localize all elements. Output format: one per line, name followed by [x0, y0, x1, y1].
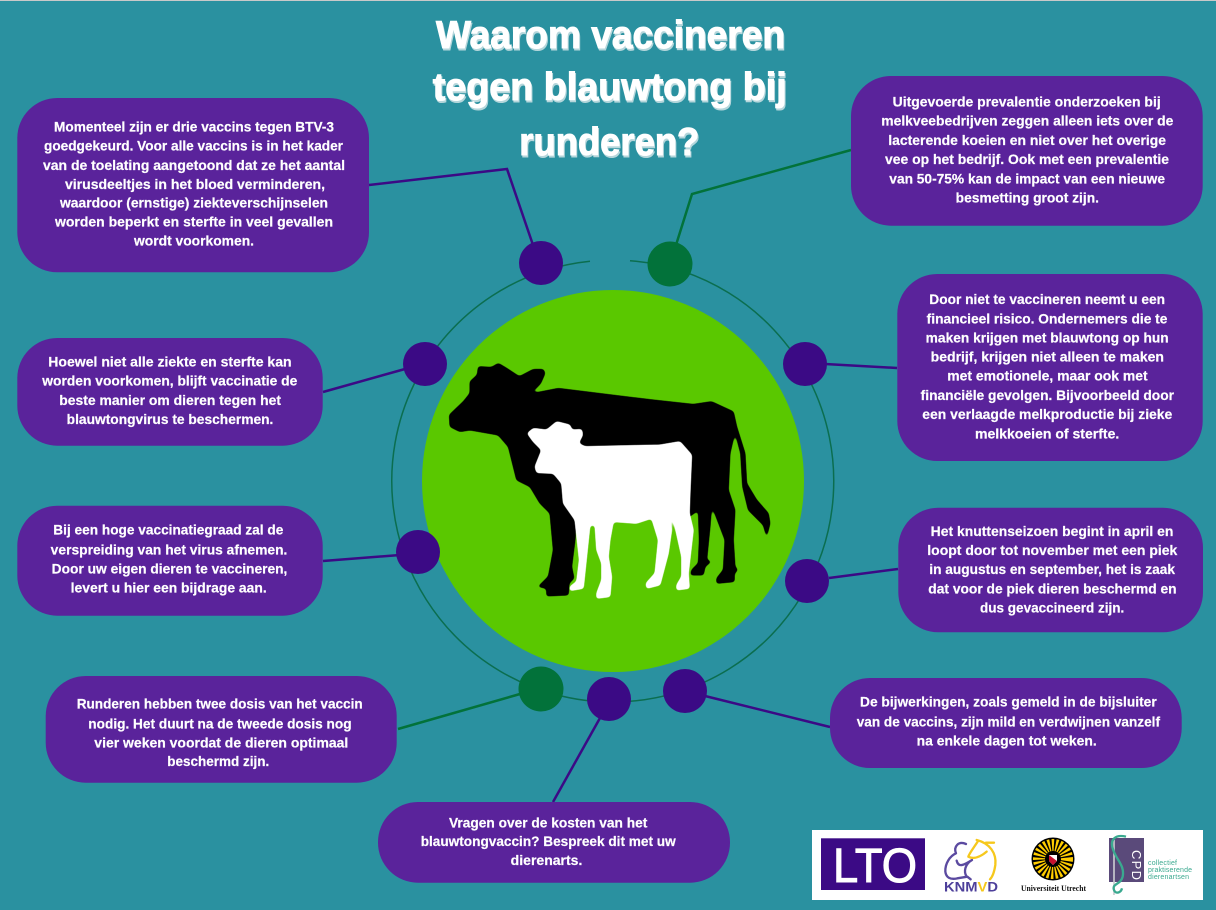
text: beste manier: Hoewel niet alle ziekte en sterfte kan — [48, 355, 292, 370]
title: Waarom vaccineren — [436, 14, 785, 57]
icon: cow and calf silhouettes — [449, 363, 770, 598]
text: beste manier: worden voorkomen, blijft vaccinatie de — [41, 374, 298, 389]
central green disc — [422, 290, 804, 672]
node 7 — [518, 666, 564, 712]
connector: knuttenseizoen — [829, 569, 898, 578]
connector: kosten — [553, 718, 600, 802]
text: vaccins BTV-3: virusdeeltjes in het bloed verminderen, — [65, 177, 325, 192]
text: kosten: Vragen over de kosten van het — [449, 815, 648, 830]
text: twee dosis: nodig. Het duurt na de tweede dosis nog — [88, 716, 352, 731]
text: vaccins BTV-3: Momenteel zijn er drie vaccins tegen BTV-3 — [54, 120, 334, 135]
title — [433, 14, 787, 164]
text: prevalentie — [881, 95, 1174, 205]
icon: black cow — [449, 363, 770, 596]
text: knuttenseizoen: loopt door tot november met een piek — [927, 543, 1178, 558]
connector: BTV-3 vaccins — [369, 169, 533, 245]
logo: CPD: dierenartsen — [1148, 874, 1189, 881]
text: twee dosis: beschermd zijn. — [167, 754, 269, 769]
text: prevalentie: melkveebedrijven zeggen alleen iets over de — [881, 114, 1174, 129]
text: financieel risico — [921, 292, 1175, 441]
text: prevalentie: Uitgevoerde prevalentie onderzoeken bij — [893, 95, 1161, 110]
logo: Universiteit Utrecht: Universiteit Utrecht — [1021, 884, 1086, 893]
text: bijwerkingen: na enkele dagen tot weken. — [917, 734, 1097, 749]
node 9 — [663, 669, 707, 713]
text: bijwerkingen: van de vaccins, zijn mild en verdwijnen vanzelf — [857, 715, 1160, 730]
text: twee dosis: Runderen hebben twee dosis van het vaccin — [77, 696, 363, 711]
text: kosten: dierenarts. — [511, 853, 582, 868]
text: financieel risico: financiële gevolgen. Bijvoorbeeld door — [921, 388, 1175, 403]
node 6 — [785, 559, 829, 603]
connector: beste manier — [323, 369, 405, 392]
text: vaccinatiegraad: levert u hier een bijdrage aan. — [71, 581, 267, 596]
text: vaccinatiegraad — [51, 522, 287, 596]
logo strip — [812, 830, 1203, 900]
text: bijwerkingen: De bijwerkingen, zoals gemeld in de bijsluiter — [860, 695, 1157, 710]
panel: knuttenseizoen — [898, 508, 1203, 632]
connector: twee dosis — [398, 694, 520, 729]
node 8 — [587, 677, 631, 721]
node 3 — [403, 342, 447, 386]
connector: financieel risico — [825, 364, 897, 368]
text: vaccins BTV-3 — [43, 120, 345, 249]
text: vaccins BTV-3: wordt voorkomen. — [133, 234, 254, 249]
panel: twee dosis — [46, 676, 397, 783]
text: vaccins BTV-3: worden beperkt en sterfte in veel gevallen — [54, 215, 333, 230]
text: prevalentie: vee op het bedrijf. Ook met een prevalentie — [885, 152, 1169, 167]
panel: vaccinatiegraad — [17, 506, 323, 616]
icon: white calf — [527, 422, 693, 598]
logo: KNMVD — [944, 840, 998, 894]
text: vaccins BTV-3: goedgekeurd. Voor alle vaccins is in het kader — [44, 139, 344, 154]
node 4 — [783, 342, 827, 386]
panel: beste manier — [17, 338, 323, 446]
node 1 — [519, 241, 563, 285]
text: prevalentie: besmetting groot zijn. — [956, 190, 1099, 205]
text: financieel risico: melkkoeien of sterfte. — [975, 426, 1119, 441]
text: financieel risico: een verlaagde melkproductie bij zieke — [922, 407, 1173, 422]
text: beste manier — [41, 355, 298, 427]
text: financieel risico: maken krijgen met blauwtong op hun — [926, 331, 1169, 346]
text: vaccinatiegraad: verspreiding van het virus afnemen. — [51, 542, 287, 557]
panel: bijwerkingen — [830, 678, 1182, 768]
text: kosten — [421, 815, 676, 868]
text: knuttenseizoen: dat voor de piek dieren beschermd en — [928, 581, 1177, 596]
text: twee dosis: vier weken voordat de dieren optimaal — [94, 735, 348, 750]
panel: kosten — [378, 802, 730, 883]
text: prevalentie: van 50-75% kan de impact van een nieuwe — [889, 171, 1165, 186]
logo: KNMVD: KNMVD — [944, 878, 998, 894]
central ring — [392, 261, 834, 702]
text: vaccinatiegraad: Bij een hoge vaccinatiegraad zal de — [53, 522, 284, 537]
connector: bijwerkingen — [705, 696, 830, 727]
logo: CPD: praktiserende — [1148, 867, 1192, 874]
panel: vaccins BTV-3 — [17, 98, 369, 272]
text: vaccinatiegraad: Door uw eigen dieren te vaccineren, — [52, 561, 287, 576]
logo: CPD: collectief — [1148, 860, 1177, 867]
panel: financieel risico — [897, 274, 1203, 461]
text: beste manier: beste manier om dieren tegen het — [59, 393, 281, 408]
connector: vaccinatiegraad — [323, 555, 400, 561]
title: tegen blauwtong bij — [433, 66, 787, 109]
text: beste manier: blauwtongvirus te beschermen. — [67, 412, 273, 427]
text: twee dosis — [77, 696, 363, 769]
text: knuttenseizoen: dus gevaccineerd zijn. — [980, 600, 1124, 615]
title: runderen? — [519, 121, 699, 164]
text: vaccins BTV-3: waardoor (ernstige) ziekteverschijnselen — [59, 196, 328, 211]
logo: CPD: CPD — [1129, 850, 1144, 880]
panel: prevalentie — [851, 76, 1203, 226]
node 2 — [648, 242, 692, 286]
node 5 — [396, 530, 440, 574]
text: kosten: blauwtongvaccin? Bespreek dit met uw — [421, 834, 676, 849]
connector: prevalentie — [676, 150, 851, 245]
text: financieel risico: financieel risico. Ondernemers die te — [927, 311, 1168, 326]
text: vaccins BTV-3: van de toelating aangetoond dat ze het aantal — [43, 158, 345, 173]
text: knuttenseizoen — [927, 524, 1178, 615]
text: financieel risico: bedrijf, krijgen niet alleen te maken — [931, 350, 1164, 365]
text: bijwerkingen — [857, 695, 1160, 749]
logo: Universiteit Utrecht — [1021, 838, 1086, 893]
logo: LTO: LTO — [833, 840, 917, 893]
text: financieel risico: Door niet te vaccineren neemt u een — [929, 292, 1165, 307]
text: knuttenseizoen: in augustus en september, het is zaak — [929, 562, 1175, 577]
text: knuttenseizoen: Het knuttenseizoen begint in april en — [931, 524, 1173, 539]
logo: CPD — [1109, 836, 1192, 895]
text: financieel risico: met emotionele, maar ook met — [947, 369, 1148, 384]
text: prevalentie: lacterende koeien en niet over het overige — [888, 133, 1166, 148]
